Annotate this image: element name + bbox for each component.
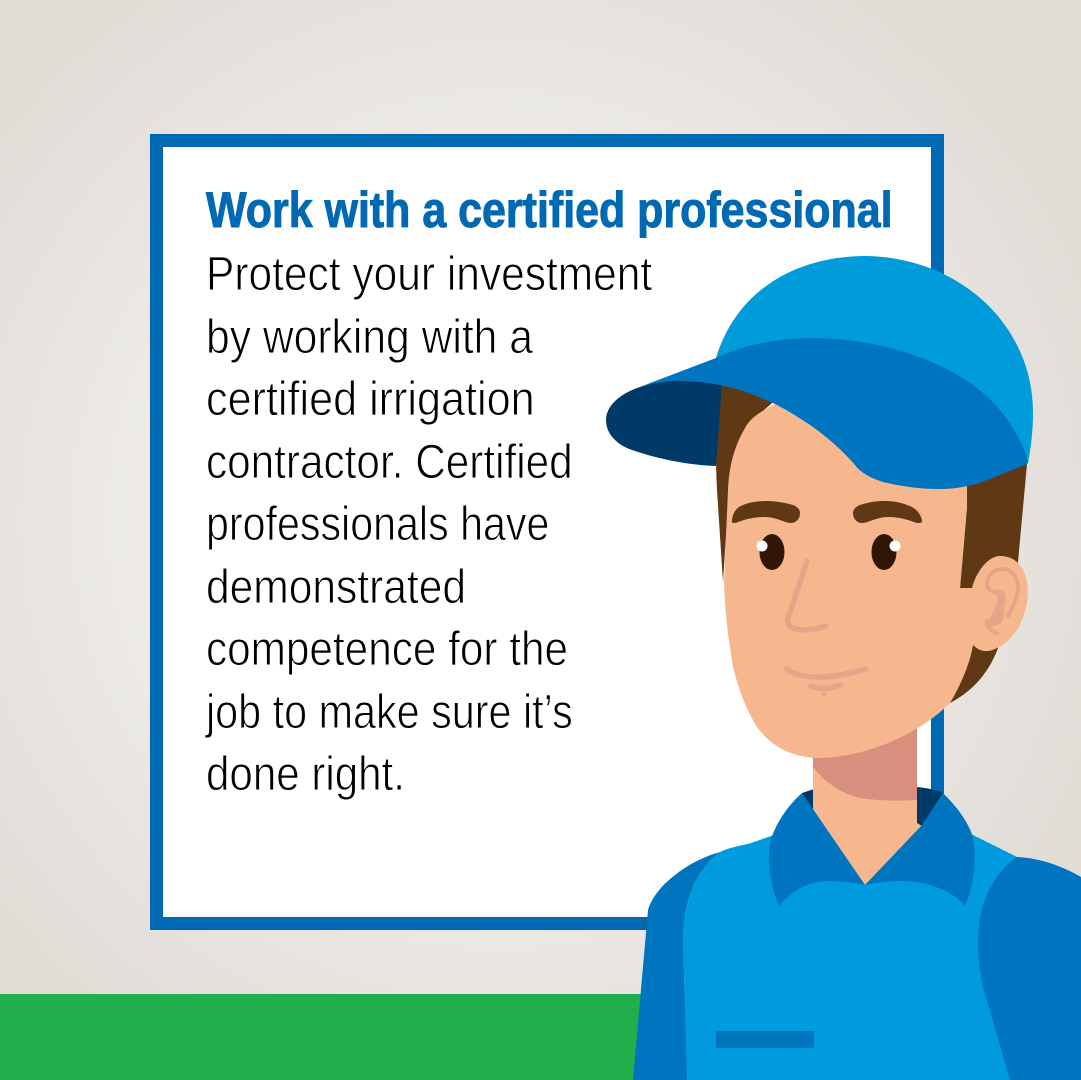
cap crown (716, 256, 1033, 463)
face (724, 404, 973, 758)
mouth (787, 669, 866, 677)
chin dot (821, 692, 827, 696)
left shoulder (633, 852, 720, 1080)
ear (972, 556, 1028, 651)
right eyebrow (853, 501, 922, 523)
shirt (683, 835, 1081, 1080)
neck (813, 700, 922, 885)
chin line (811, 685, 840, 689)
title: Work with a certified professional (206, 182, 893, 238)
body text: professionals have (206, 498, 549, 551)
body text: contractor. Certified (206, 436, 573, 488)
ear inner fill (989, 590, 1005, 623)
panel: white framed board (150, 134, 944, 930)
cap brim (637, 338, 1028, 489)
left eye (760, 534, 784, 570)
right eye (872, 534, 896, 570)
pocket (716, 1031, 814, 1048)
body text: by working with a (206, 310, 533, 364)
right eye highlight (890, 540, 900, 552)
left eye highlight (756, 540, 768, 552)
body text: Protect your investment (206, 248, 652, 301)
right sleeve (978, 857, 1081, 1080)
left eyebrow (732, 501, 800, 523)
collar (769, 793, 975, 906)
ground (0, 994, 1081, 1080)
ear detail (987, 569, 1018, 633)
nose (788, 561, 826, 630)
body text: done right. (206, 748, 405, 801)
cap visor underside (606, 378, 722, 466)
body text: certified irrigation (206, 373, 535, 426)
body text: demonstrated (206, 560, 466, 614)
body text: job to make sure it’s (206, 686, 573, 738)
collar back (802, 787, 943, 828)
body text (205, 248, 652, 801)
hair right (950, 464, 1027, 703)
neck shadow (813, 700, 917, 801)
body text: competence for the (206, 623, 568, 676)
hair left (716, 372, 785, 582)
